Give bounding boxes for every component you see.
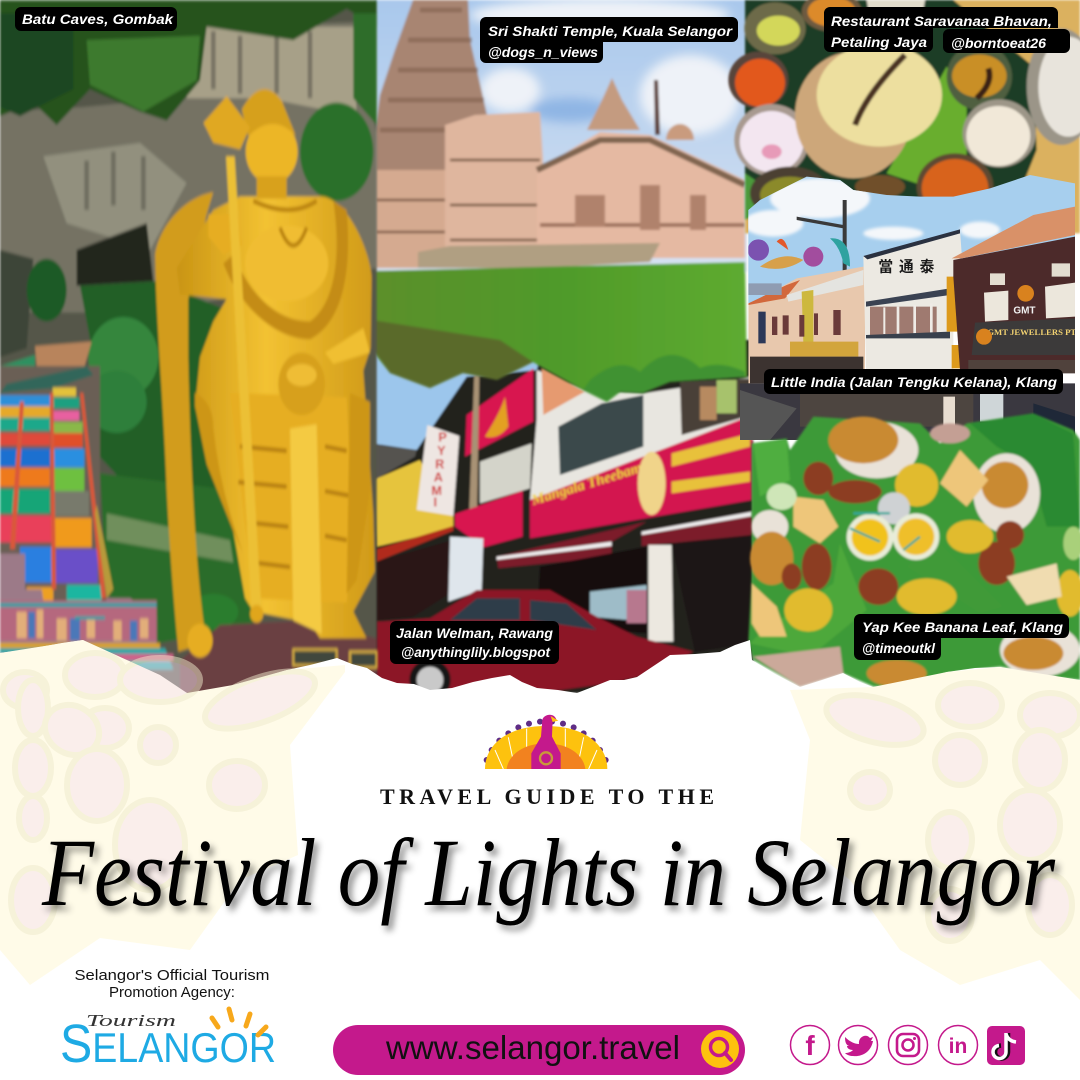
peacock body [531,715,561,769]
photo label: Restaurant Saravanaa Bhavan: Restaurant Saravanaa Bhavan, [831,13,1052,29]
lamp post [796,200,847,270]
peacock inner feathers [507,743,585,769]
photo label: Sri Shakti Temple: Sri Shakti Temple, Kuala Selangor [488,23,734,39]
Mangala Theebam big sign [529,415,752,538]
search bar: website: www.selangor.travel [385,1029,680,1066]
icon: instagram [888,1026,928,1064]
Mangala Theebam big sign: Mangala Theebam [529,460,644,509]
orange bowl [728,52,788,108]
panel: Yap Kee banana leaf photo [748,413,1080,687]
logo sun rays [212,1009,266,1035]
curry bowl [917,153,993,220]
statue base [180,621,377,700]
panel: Saravanaa Bhavan thali photo [728,0,1080,233]
Pyramid sign: R [435,457,444,471]
street clouds [743,178,1000,240]
Thai Thong pawnshop building [863,229,966,370]
thali plate [745,0,1037,217]
Pyramid sign: I [434,496,437,510]
peacock feather tips [484,719,609,763]
photo label: Restaurant Saravanaa Bhavan: Petaling Jaya [831,34,927,50]
cave opening [77,223,153,286]
temple sky [375,0,747,272]
photo label: Jalan Welman [390,621,559,664]
Thai Thong pawnshop building: 當通泰 [878,256,940,277]
photo label: Restaurant Saravanaa Bhavan: @borntoeat26 [951,35,1046,51]
mid trees [80,281,233,504]
street sky [740,170,1075,303]
drink cups [847,513,939,561]
sambal rice [750,417,1063,687]
icon: facebook [790,1026,830,1064]
photo label: Restaurant Saravanaa Bhavan [824,7,1070,53]
GMT jewellers building: GMT [1013,305,1036,316]
dal bowl [947,43,1012,110]
papadums [752,450,1062,637]
vegetable bowl [750,167,830,220]
banana leaf [887,67,967,187]
cliff rock [0,22,377,313]
right mandala petals [821,683,1080,941]
shrine gateway [0,554,173,670]
temple tower [375,0,487,268]
icon: twitter [838,1026,878,1064]
festive decoration [748,238,850,269]
GMT jewellers building [952,207,1080,373]
logo: Tourism Selangor: SELANGOR [60,1014,276,1074]
milk bowl [963,99,1036,167]
poster [448,537,483,602]
clothes [590,585,647,622]
right cream mandala [790,667,1080,1000]
street sky [372,347,543,450]
temple hall above stairs [35,342,92,371]
Pyramid sign: P [438,431,447,445]
statue head and crown [246,120,298,184]
agency caption: Selangor's Official Tourism [74,967,270,984]
cucumber [767,483,797,510]
panel: Batu Caves photo [0,0,377,700]
rice mounds [752,422,1080,687]
icon: tiktok [987,1026,1025,1065]
icon: magnifier [701,1030,739,1068]
store interiors [537,547,647,633]
banana leaf base [748,413,1080,687]
photo label: Sri Shakti Temple [480,17,738,63]
Pyramid sign: M [431,484,442,498]
awnings [497,522,647,568]
left cream mandala [0,640,345,985]
rainbow stairs [0,366,113,616]
torn white paper [0,640,1080,1080]
icon: peacock [484,715,609,769]
statue spear [203,96,250,150]
yogurt bowl [734,104,809,176]
photo label: Jalan Welman: @anythinglily.blogspot [401,644,551,660]
panel: Sri Shakti Temple photo [370,0,747,402]
temple hall [418,78,745,268]
yellow vegetables [784,463,1080,632]
temple grass lawn [370,262,747,402]
panel: Jalan Welman street photo [372,340,753,701]
photo label: Sri Shakti Temple: @dogs_n_views [488,44,598,60]
elephant frieze [418,243,660,268]
peacock fan [485,726,607,769]
top orange dish [802,0,862,32]
left mandala petals [3,653,322,932]
roti [795,52,912,178]
statue necklace [253,201,317,246]
panel: Little India Klang street photo [740,170,1080,440]
heading: travel guide: TRAVEL GUIDE TO THE [380,784,714,809]
photo label: Yap Kee Banana Leaf: @timeoutkl [862,640,936,656]
statue left drape [155,192,213,652]
rice bowl [1027,28,1080,145]
logo: Tourism Selangor: Tourism [86,1011,176,1030]
statue body [177,196,375,638]
photo label: Little India: Little India (Jalan Tengku Kelana), Klang [771,374,1057,390]
papadum [817,43,942,147]
upper foliage [0,0,377,125]
search bar: website [333,1025,745,1075]
fried chicken [782,462,1024,605]
Pyramid sign [417,425,459,516]
Pyramid sign: Y [437,444,446,458]
white column and dark shop [648,545,673,642]
photo label: Little India [764,369,1063,394]
icon: facebook: f [805,1030,815,1061]
icon: linkedin: in [949,1035,967,1058]
golden Murugan statue [155,89,375,658]
social icons [790,1026,1025,1065]
photo label: Yap Kee Banana Leaf: Yap Kee Banana Leaf, Klang [862,619,1063,635]
photo label: Yap Kee Banana Leaf [854,614,1069,660]
temple clouds [470,0,740,135]
photo label: Jalan Welman: Jalan Welman, Rawang [396,625,553,641]
red car [377,590,693,701]
Pyramid sign: A [434,471,443,485]
top red sign [465,368,533,457]
agency caption: Promotion Agency: [109,984,235,1001]
drink can [878,492,910,524]
road and crowd [740,383,1075,440]
lower greenery [100,473,253,643]
photo label: Batu Caves: Batu Caves, Gombak [22,11,174,27]
street left roof and yellow building [373,444,417,480]
chutney bowl [744,2,806,54]
upper storefront walls [530,370,753,500]
lower red sign [455,491,523,547]
photo label: Batu Caves [15,7,177,31]
pole [468,375,479,535]
left shophouses [748,267,865,383]
icon: linkedin [938,1026,978,1064]
